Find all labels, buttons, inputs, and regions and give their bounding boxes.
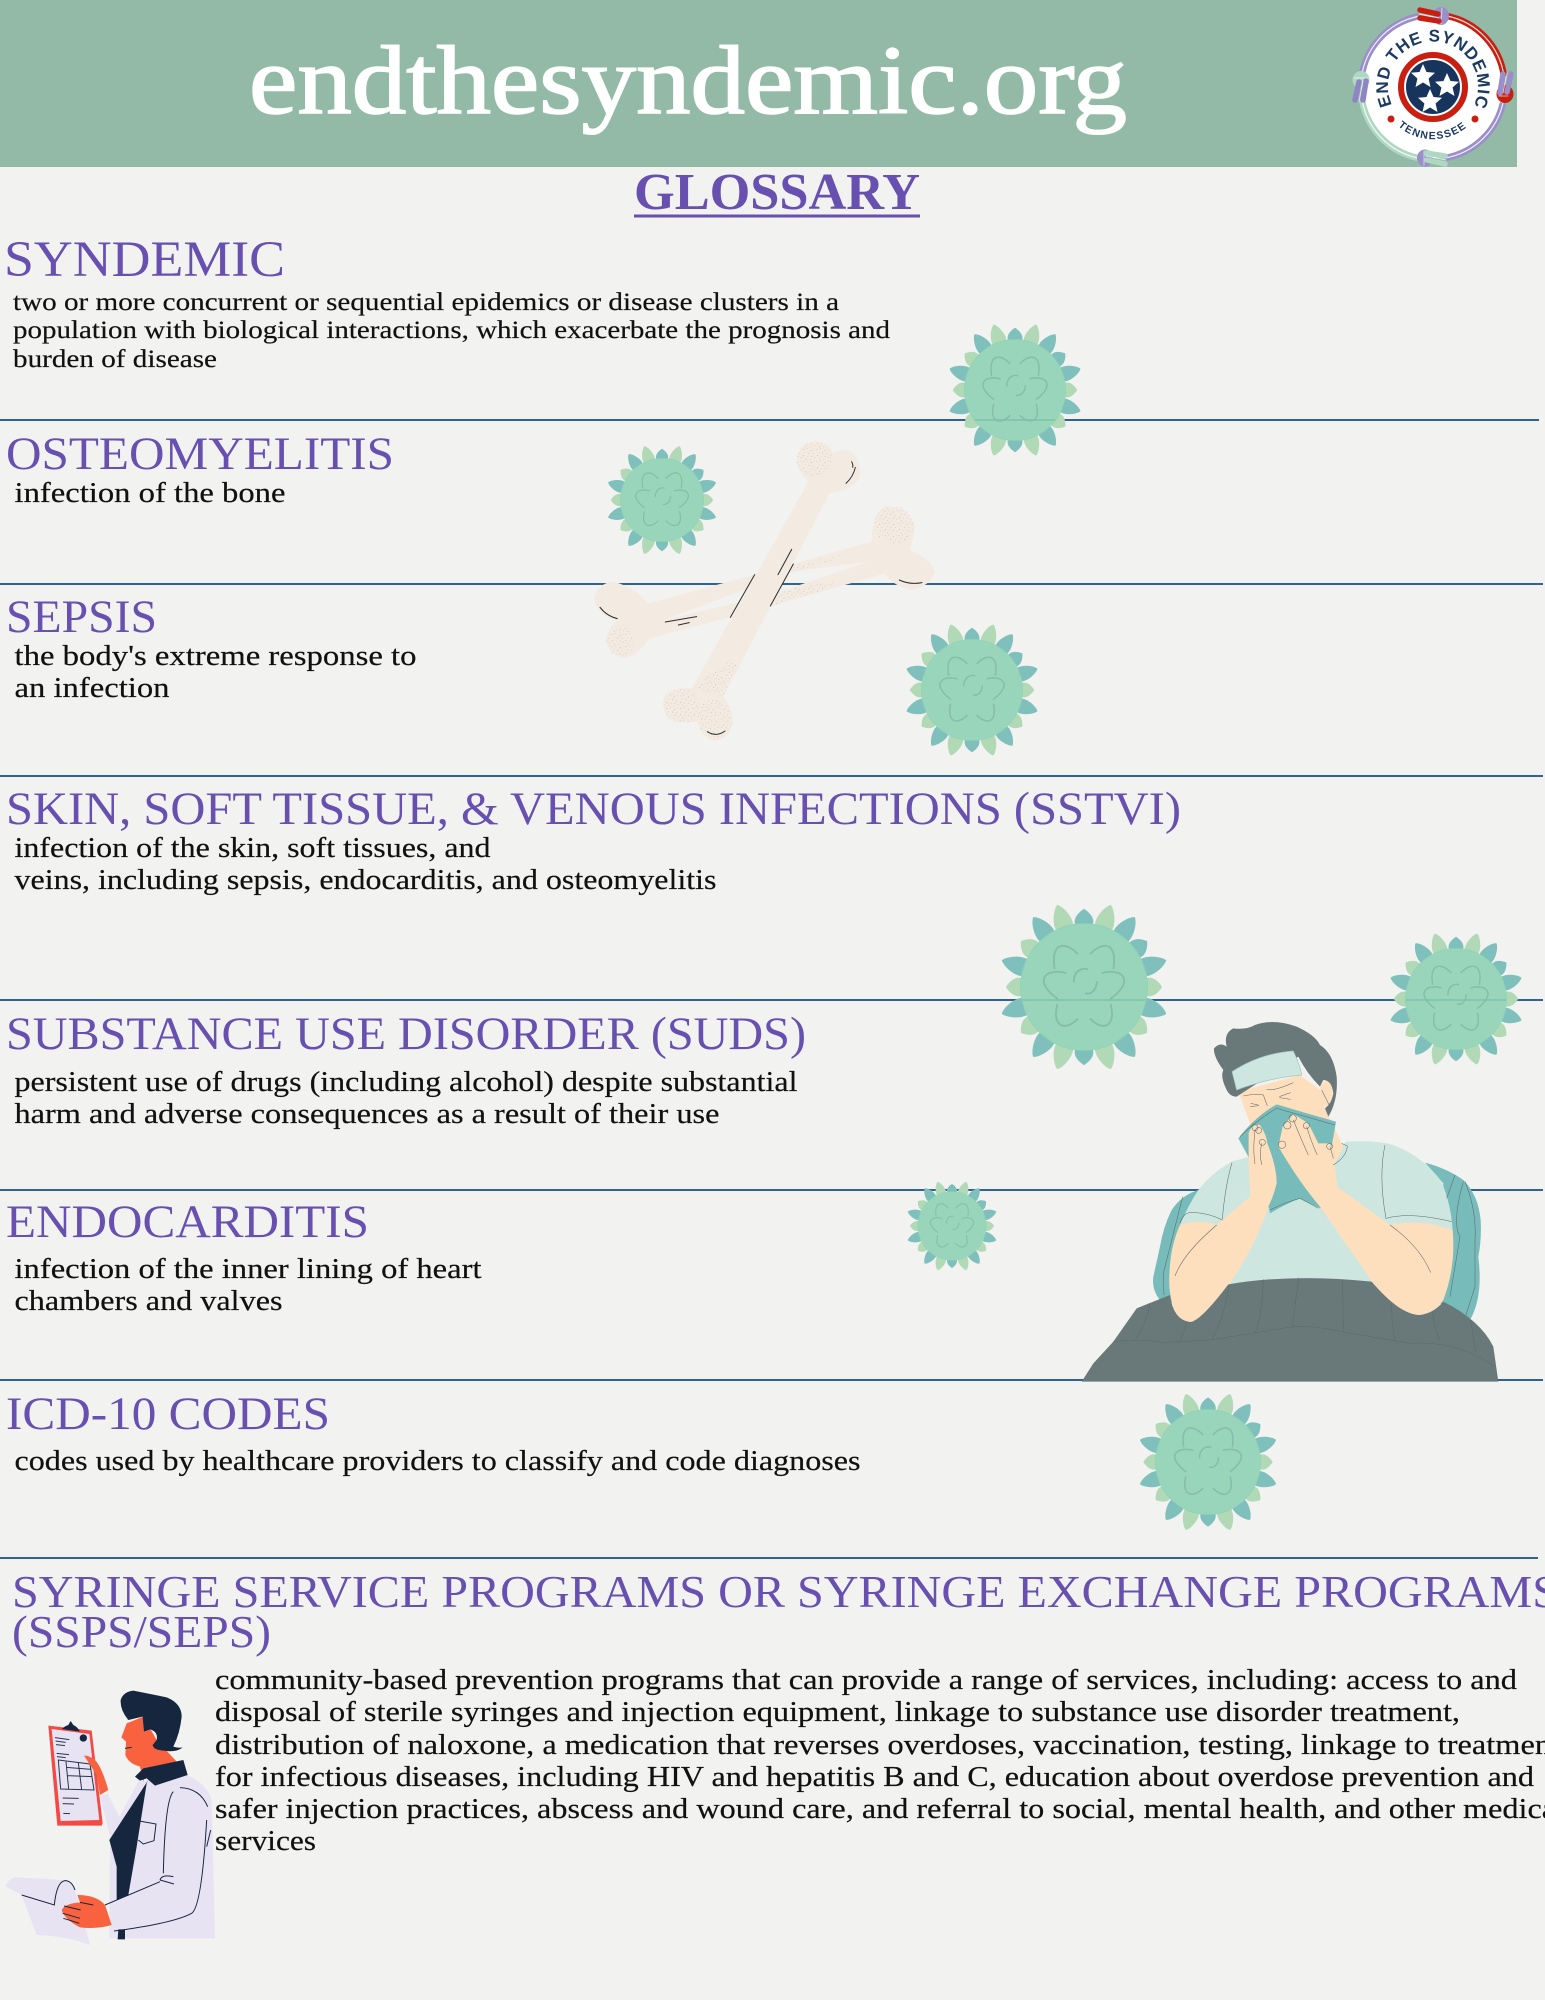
definition: syringe programs: [215, 1665, 1545, 1857]
entry: syndemic: [4, 232, 890, 373]
clipboard: [48, 1721, 103, 1826]
logo: End the Syndemic Tennessee: END THE SYNDEMIC: [1376, 30, 1490, 108]
virus 7: [1138, 1392, 1278, 1532]
chair back: [1153, 1163, 1481, 1320]
entry: endocarditis: ENDOCARDITIS: [6, 1196, 369, 1248]
entry: syndemic: SYNDEMIC: [4, 232, 285, 288]
entry: substance use disorder: SUBSTANCE USE DISORDER (SUDS): [6, 1008, 806, 1060]
entry: endocarditis: [6, 1196, 482, 1317]
shirt: [1180, 1141, 1453, 1285]
knot: bottom: [1417, 150, 1446, 166]
entry: icd-10 codes: [6, 1388, 860, 1477]
illustration: crossed bones: [594, 441, 935, 743]
definition: sepsis: the body's extreme response to: [14, 641, 417, 672]
towel: [1238, 1104, 1337, 1213]
definition: suds: [14, 1067, 798, 1130]
header banner: [0, 0, 1517, 167]
tie: [109, 1780, 148, 1939]
hand holding paper: [62, 1895, 112, 1928]
definition: endocarditis: chambers and valves: [14, 1286, 282, 1317]
hair: [1214, 1022, 1337, 1117]
definition: sepsis: an infection: [14, 673, 170, 704]
definition: syringe programs: distribution of naloxone, a medication that reverses overdoses, vaccination, testing, linkage to treatment: [215, 1730, 1545, 1761]
definition: sstvi: [14, 833, 716, 896]
entry: icd-10 codes: codes used by healthcare providers to classify and code diagnoses: [14, 1446, 860, 1477]
entry: sstvi: [6, 783, 1181, 896]
logo: End the Syndemic Tennessee: TENNESSEE: [1400, 120, 1466, 140]
definition: syndemic: two or more concurrent or sequential epidemics or disease clusters in a: [13, 287, 839, 316]
virus 2: [606, 444, 718, 556]
line details: [1113, 1083, 1495, 1367]
logo: End the Syndemic Tennessee: [1352, 7, 1514, 167]
neck and face: [1238, 1075, 1343, 1167]
bone a: [663, 441, 860, 741]
heading: syringe programs: (SSPS/SEPS): [12, 1606, 271, 1657]
illustration: sick man blowing nose: [1082, 1022, 1498, 1382]
illustration: doctor with clipboard: [6, 1691, 215, 1945]
definition: syringe programs: disposal of sterile syringes and injection equipment, linkage to substance use disorder treatment,: [215, 1697, 1460, 1728]
knot: top: [1419, 7, 1449, 25]
definition: syndemic: population with biological interactions, which exacerbate the prognosis and: [13, 315, 890, 344]
definition: endocarditis: [14, 1254, 482, 1317]
site title: endthesyndemic.org: [249, 27, 1127, 135]
left arm and hand: [1169, 1125, 1277, 1322]
coat: [100, 1775, 215, 1938]
hair: [121, 1691, 183, 1751]
definition: suds: harm and adverse consequences as a result of their use: [14, 1099, 720, 1130]
blanket: [1082, 1278, 1498, 1382]
entry: syringe service programs: [12, 1566, 1545, 1857]
virus 5: [1388, 931, 1524, 1067]
entry: osteomyelitis: [6, 428, 394, 509]
definition: sepsis: [14, 641, 417, 704]
section dividers: [0, 420, 1543, 1558]
collar: [135, 1760, 188, 1786]
cooling pad: [1232, 1051, 1302, 1090]
virus 1: [947, 322, 1083, 458]
line details: [22, 1747, 211, 1931]
definition: suds: persistent use of drugs (including alcohol) despite substantial: [14, 1067, 798, 1098]
definition: syringe programs: services: [215, 1826, 316, 1857]
virus 6: [906, 1180, 998, 1272]
paper sheet: [6, 1877, 90, 1945]
entry: sepsis: [6, 591, 417, 704]
heading: syringe programs: [12, 1566, 1545, 1657]
three stars: [1411, 64, 1459, 112]
entry: osteomyelitis: infection of the bone: [14, 478, 286, 509]
virus 3: [904, 622, 1040, 758]
red ring and navy roundel: [1401, 55, 1465, 119]
knot: left: [1352, 71, 1370, 101]
definition: syringe programs: community-based prevention programs that can provide a range of services, including: access to and: [215, 1665, 1517, 1696]
definition: sstvi: infection of the skin, soft tissues, and: [14, 833, 490, 864]
right arm and hand: [1278, 1114, 1453, 1315]
entry: icd-10 codes: ICD-10 CODES: [6, 1388, 330, 1440]
heading: syringe programs: SYRINGE SERVICE PROGRAMS OR SYRINGE EXCHANGE PROGRAMS: [12, 1566, 1545, 1617]
definition: syndemic: burden of disease: [13, 344, 217, 373]
bone b: [594, 506, 935, 658]
glossary heading: GLOSSARY: [634, 164, 920, 221]
neck and face: [121, 1717, 177, 1782]
definition: endocarditis: infection of the inner lining of heart: [14, 1254, 482, 1285]
definition: syndemic: [13, 287, 890, 373]
definition: syringe programs: for infectious diseases, including HIV and hepatitis B and C, education about overdose prevention and: [215, 1762, 1534, 1793]
definition: sstvi: veins, including sepsis, endocarditis, and osteomyelitis: [14, 865, 716, 896]
entry: sstvi: SKIN, SOFT TISSUE, & VENOUS INFECTIONS (SSTVI): [6, 783, 1181, 835]
knot: right: [1496, 73, 1514, 103]
entry: sepsis: SEPSIS: [6, 591, 157, 643]
entry: osteomyelitis: OSTEOMYELITIS: [6, 428, 394, 480]
virus 4: [999, 902, 1169, 1072]
hand on clipboard: [84, 1756, 108, 1795]
definition: syringe programs: safer injection practices, abscess and wound care, and referral to social, mental health, and other medical: [215, 1794, 1545, 1825]
entry: substance use disorder: [6, 1008, 806, 1130]
